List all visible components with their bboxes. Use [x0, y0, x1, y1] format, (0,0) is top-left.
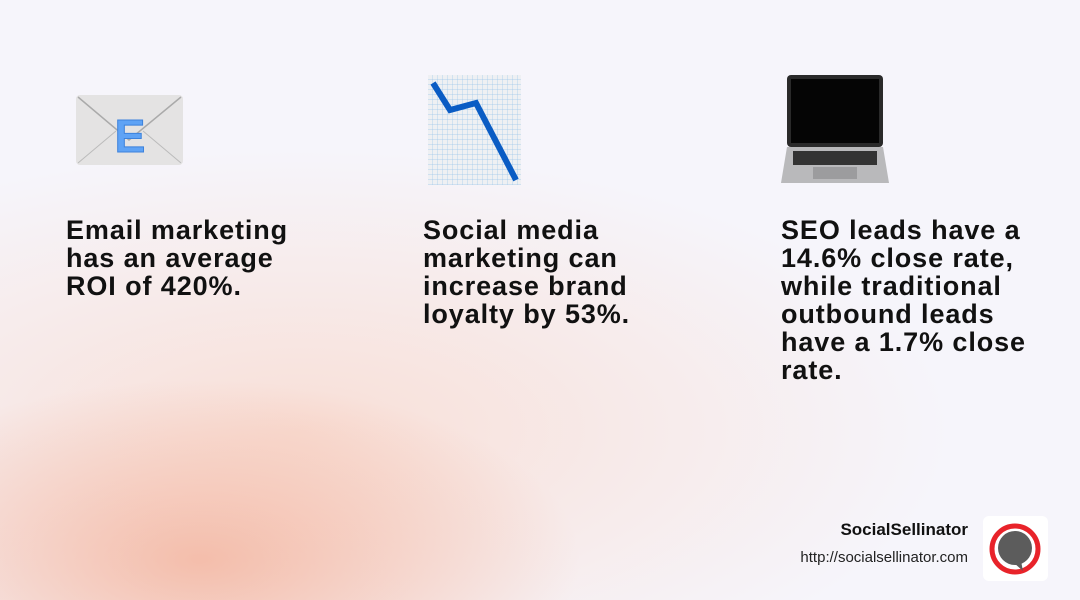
text: SEO stat: have a 1.7% close	[781, 327, 1026, 357]
text: social stat: marketing can	[423, 243, 618, 273]
text: social stat: increase brand	[423, 271, 628, 301]
text: SEO stat: while traditional	[781, 271, 1002, 301]
text: SEO stat: 14.6% close rate,	[781, 243, 1014, 273]
icon: chart decreasing	[428, 75, 521, 185]
text: email stat: ROI of 420%.	[66, 271, 242, 301]
text: social stat	[423, 215, 630, 329]
logo	[983, 516, 1048, 581]
text: SEO stat	[780, 215, 1026, 385]
text: email stat	[66, 215, 288, 301]
icon: envelope	[76, 95, 183, 165]
text: SEO stat: SEO leads have a	[781, 215, 1021, 245]
brand url: http://socialsellinator.com	[800, 549, 968, 566]
text: email stat: has an average	[66, 243, 274, 273]
text: SEO stat: outbound leads	[781, 299, 995, 329]
text: social stat: loyalty by 53%.	[423, 299, 630, 329]
text: SEO stat: rate.	[781, 355, 843, 385]
text: social stat: Social media	[423, 215, 599, 245]
brand name: SocialSellinator	[840, 520, 968, 539]
icon: envelope: E	[115, 110, 145, 162]
icon: laptop	[781, 75, 889, 183]
text: email stat: Email marketing	[66, 215, 288, 245]
